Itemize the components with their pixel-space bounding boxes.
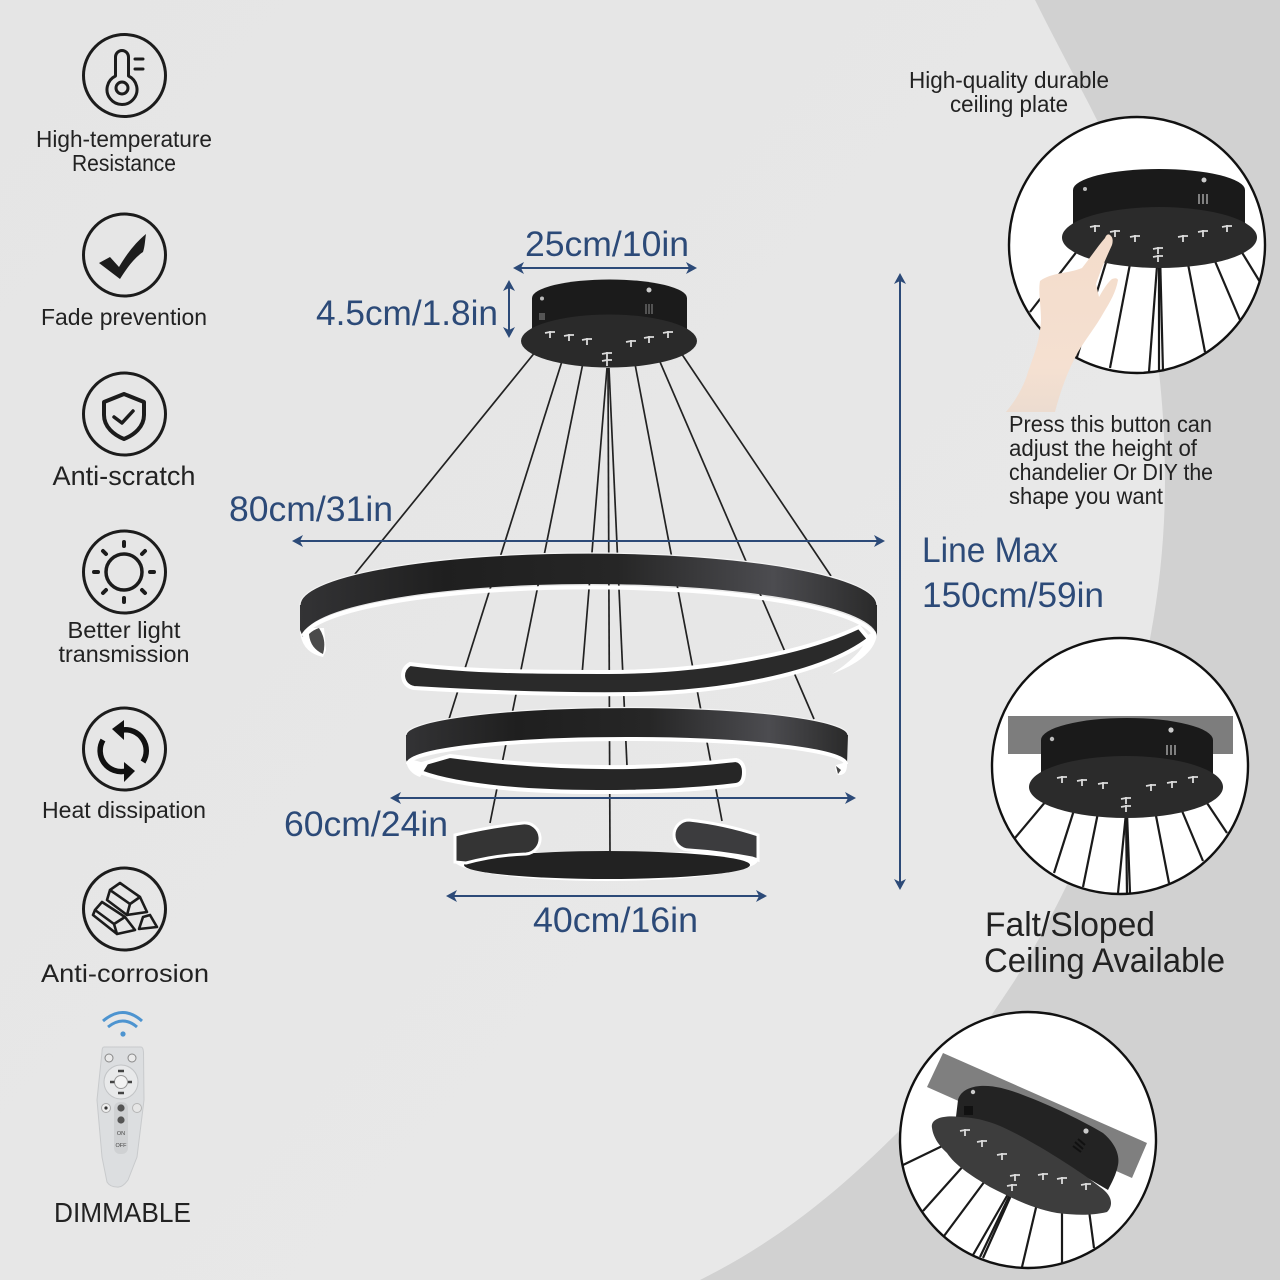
label: anti-corrosion: Anti-corrosion (41, 960, 209, 988)
label: high-temperature resistance (36, 126, 212, 176)
icon: thermometer (84, 34, 166, 116)
label: better light transmission (58, 617, 190, 667)
outer ring 80cm (300, 553, 877, 694)
icon: check mark (84, 214, 166, 296)
text: flat and sloped ceiling (984, 906, 1225, 980)
label: dimmable: DIMMABLE (54, 1197, 191, 1228)
dimension: 25cm/10in (513, 225, 697, 274)
text: flat and sloped ceiling: Falt/Sloped (985, 906, 1155, 944)
dimension: 4.5cm/1.8in (316, 280, 515, 338)
heading: ceiling plate (909, 67, 1109, 117)
dimension: 60cm/24in (284, 792, 856, 844)
ceiling plate (521, 280, 697, 368)
label: high-temperature resistance: Resistance (72, 150, 176, 176)
dimension: line max: Line Max (922, 531, 1058, 570)
text: flat and sloped ceiling: Ceiling Available (984, 942, 1225, 980)
text: button instructions (1009, 411, 1213, 509)
label: fade prevention: Fade prevention (41, 304, 207, 330)
label: anti-scratch: Anti-scratch (52, 461, 196, 491)
text: button instructions: shape you want (1009, 483, 1164, 509)
text: button instructions: Press this button can (1009, 411, 1212, 437)
dimension: 80cm/31in: 80cm/31in (229, 490, 393, 529)
dimension: line max (894, 273, 1104, 890)
icon: wifi signal (103, 1012, 142, 1037)
suspension wires (355, 335, 831, 854)
label: better light transmission: Better light (68, 617, 181, 643)
label: high-temperature resistance: High-temperature (36, 126, 212, 152)
bottom ring 40cm (454, 820, 758, 881)
dimension: 4.5cm/1.8in: 4.5cm/1.8in (316, 294, 498, 333)
icon: sun (84, 531, 166, 613)
dimension: line max: 150cm/59in (922, 576, 1104, 615)
text: button instructions: chandelier Or DIY the (1009, 459, 1213, 485)
dimension: 60cm/24in: 60cm/24in (284, 805, 448, 844)
chandelier (300, 280, 877, 881)
dimension: 80cm/31in (229, 490, 885, 547)
icon: remote control (97, 1047, 144, 1187)
dimension: 25cm/10in: 25cm/10in (525, 225, 689, 264)
icon: metal bars (84, 868, 166, 950)
heading: ceiling plate: ceiling plate (950, 91, 1068, 117)
text: button instructions: adjust the height of (1009, 435, 1198, 461)
heading: ceiling plate: High-quality durable (909, 67, 1109, 93)
label: better light transmission: transmission (58, 641, 190, 667)
detail circle: button on plate (1009, 117, 1265, 373)
dimension: 40cm/16in: 40cm/16in (533, 901, 698, 940)
detail circle: sloped ceiling (900, 1012, 1156, 1268)
detail circle: flat ceiling (992, 638, 1248, 894)
icon: refresh arrows (84, 708, 166, 790)
dimension: 40cm/16in (446, 890, 767, 940)
icon: shield (84, 373, 166, 455)
icon: remote control: OFF (116, 1143, 127, 1149)
icon: pointing hand (1006, 234, 1118, 412)
middle ring 60cm (406, 708, 848, 792)
icon: remote control: ON (117, 1131, 125, 1137)
label: heat dissipation: Heat dissipation (42, 797, 206, 823)
